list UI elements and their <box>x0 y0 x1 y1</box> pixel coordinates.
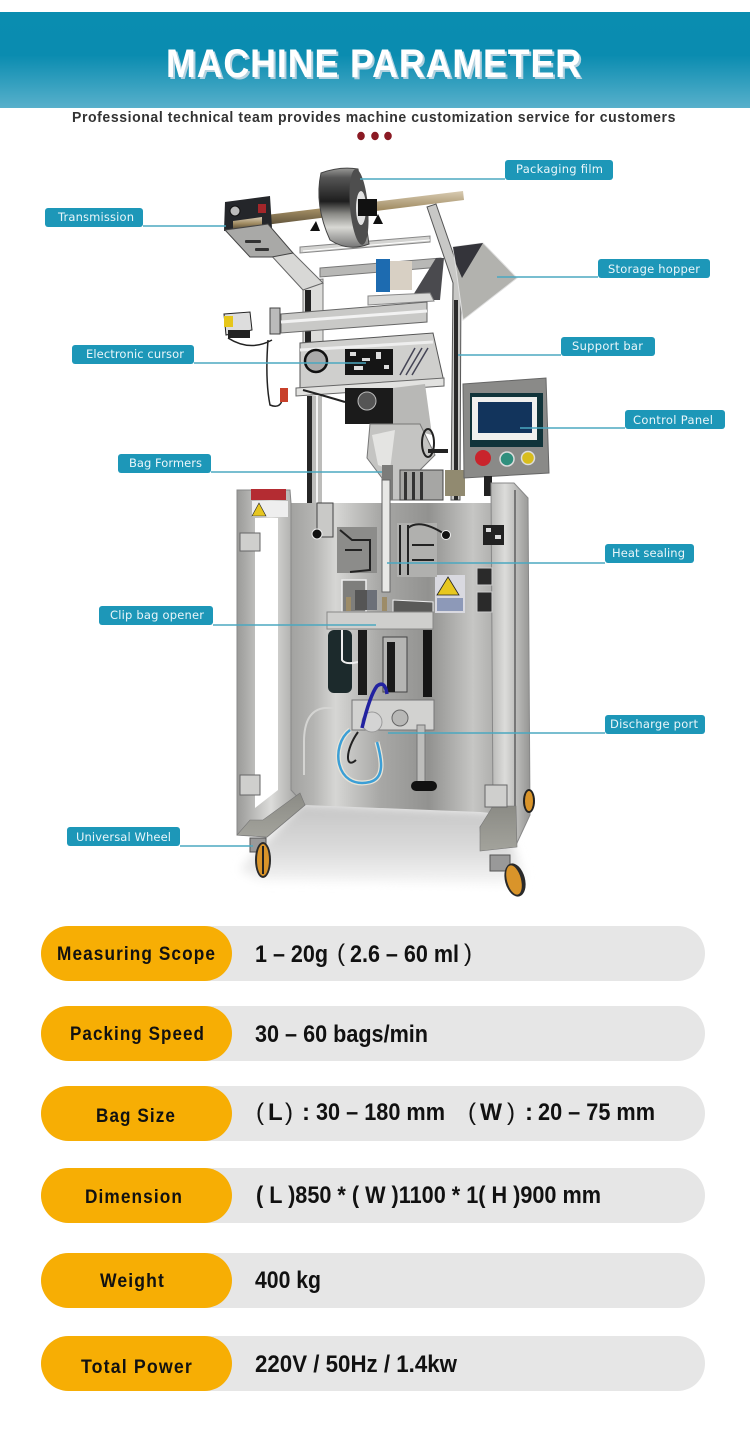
parameter row: Total Power: Total Power <box>81 1357 193 1378</box>
callout: Clip bag opener <box>99 606 376 625</box>
callout: Discharge port: Discharge port <box>610 717 698 731</box>
parameter row: Dimension: ( L )850 * ( W )1100 * 1( H )900 mm <box>256 1182 601 1209</box>
parameter row: Measuring Scope: Measuring Scope <box>57 944 216 965</box>
bracket and bolts <box>317 503 333 537</box>
parameter row: Weight: 400 kg <box>255 1267 321 1294</box>
callout: Universal Wheel: Universal Wheel <box>76 830 171 844</box>
header banner <box>0 12 750 108</box>
parameter row: Dimension: Dimension <box>85 1187 183 1208</box>
parameter row: Bag Size: Bag Size <box>96 1106 176 1127</box>
callout: Clip bag opener: Clip bag opener <box>110 608 204 622</box>
callout: Control Panel <box>520 410 725 429</box>
callout: Control Panel: Control Panel <box>633 413 713 427</box>
parameter row: Measuring Scope: ( <box>337 940 345 967</box>
parameter row: Packing Speed: Packing Speed <box>70 1024 205 1045</box>
callout: Storage hopper <box>497 259 710 278</box>
film roll shaft <box>233 191 464 229</box>
parameter row: Bag Size: L <box>268 1099 283 1126</box>
parameter row: Weight: Weight <box>100 1271 165 1292</box>
callout: Universal Wheel <box>67 827 253 846</box>
upper frame <box>268 204 461 506</box>
callout: Bag Formers: Bag Formers <box>129 456 202 470</box>
parameter row: Measuring Scope: 1 – 20g <box>255 941 328 968</box>
callout: Heat sealing: Heat sealing <box>612 546 685 560</box>
parameter row: Measuring Scope: 2.6 – 60 ml <box>350 941 459 968</box>
callout: Packaging film <box>360 160 613 180</box>
callout: Support bar <box>458 337 655 356</box>
parameter row: Bag Size: : <box>525 1099 533 1126</box>
parameter row: Total Power <box>41 1336 705 1391</box>
parameter row: Packing Speed: 30 – 60 bags/min <box>255 1021 428 1048</box>
discharge port <box>352 700 434 730</box>
parameter row: Bag Size <box>41 1086 705 1141</box>
parameter row: Measuring Scope <box>41 926 705 981</box>
warning labels <box>251 489 286 500</box>
packaging film roll <box>310 168 383 247</box>
blue motor <box>368 259 434 305</box>
right frame <box>480 483 530 850</box>
parameter row: Bag Size: 30 – 180 mm <box>316 1099 445 1126</box>
transmission box <box>224 196 293 257</box>
left frame <box>237 490 305 837</box>
parameter row: Measuring Scope: ) <box>464 940 472 967</box>
decorative dots <box>357 132 392 140</box>
callout: Transmission <box>45 208 226 227</box>
storage hopper <box>453 243 517 320</box>
parameter row: Bag Size: ) <box>507 1099 515 1126</box>
parameter row: Dimension <box>41 1168 705 1223</box>
clip bag opener plate <box>327 612 433 629</box>
parameter row: Bag Size: W <box>480 1099 502 1126</box>
parameter row: Bag Size: ) <box>285 1099 293 1126</box>
parameter row: Total Power: 220V / 50Hz / 1.4kw <box>255 1351 457 1378</box>
parameter row: Bag Size: : <box>302 1099 310 1126</box>
parameter row: Packing Speed <box>41 1006 705 1061</box>
hinges <box>240 533 507 807</box>
title: MACHINE PARAMETER <box>168 44 584 88</box>
callout: Discharge port <box>388 715 705 734</box>
callout: Packaging film: Packaging film <box>516 162 603 176</box>
callout: Storage hopper: Storage hopper <box>608 262 700 276</box>
callout: Electronic cursor: Electronic cursor <box>86 347 184 361</box>
parameter row: Bag Size: ( <box>256 1099 264 1126</box>
callout: Support bar: Support bar <box>572 339 643 353</box>
bag former <box>367 424 465 500</box>
electronic cursor unit <box>224 302 444 435</box>
machine illustration <box>224 168 549 899</box>
control panel <box>463 378 549 496</box>
parameter row: Bag Size: ( <box>468 1099 476 1126</box>
subtitle: Professional technical team provides machine customization service for customers <box>72 110 676 126</box>
heat sealing clusters <box>337 527 377 573</box>
lower guides <box>328 630 352 693</box>
parameter row: Weight <box>41 1253 705 1308</box>
callout: Electronic cursor <box>72 345 366 364</box>
callout: Transmission: Transmission <box>57 210 134 224</box>
callout: Heat sealing <box>387 544 694 563</box>
universal wheels <box>250 789 535 899</box>
machine body <box>237 480 530 851</box>
central bag tube <box>382 480 390 592</box>
callout: Bag Formers <box>118 454 382 473</box>
floor shadow <box>240 803 525 884</box>
title: MACHINE PARAMETER <box>166 42 582 86</box>
parameter row: Bag Size: 20 – 75 mm <box>538 1099 655 1126</box>
